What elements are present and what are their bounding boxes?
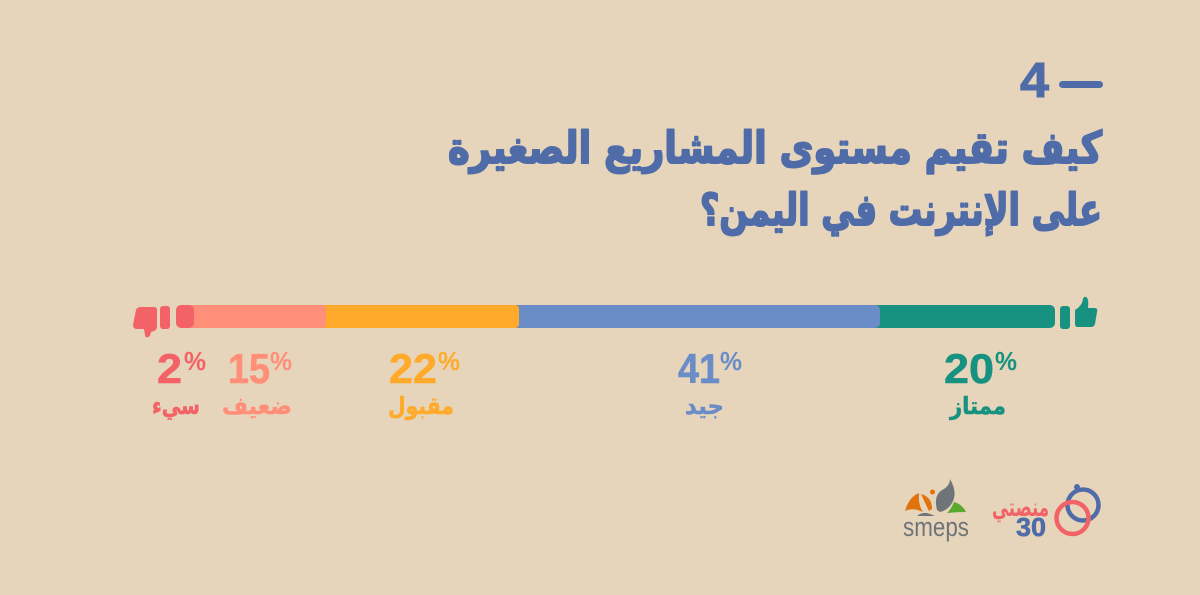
- rating: weak 15%: %: [270, 346, 292, 376]
- stacked rating bar: [176, 305, 1055, 328]
- rating: good 41%: [678, 345, 742, 420]
- rating: acceptable 22%: مقبول: [388, 392, 454, 420]
- rating: poor 2%: سيء: [152, 392, 200, 420]
- logo: smeps: [903, 479, 969, 542]
- logo: minassati 30: [992, 484, 1098, 542]
- rating: acceptable 22%: %: [438, 346, 460, 376]
- rating: excellent 20%: %: [995, 346, 1017, 376]
- rating: good 41%: 41: [678, 345, 720, 392]
- rating: excellent 20%: [944, 345, 1017, 420]
- rating: excellent 20%: ممتاز: [949, 392, 1006, 420]
- title: [448, 123, 1102, 236]
- rating: weak 15%: 15: [228, 345, 270, 392]
- icon: thumbs down: [133, 306, 170, 337]
- rating: poor 2%: %: [184, 346, 206, 376]
- rating: poor 2%: 2: [157, 345, 182, 392]
- rating: acceptable 22%: [388, 345, 460, 420]
- rating: weak 15%: ضعيف: [222, 392, 292, 420]
- rating: weak 15%: [222, 345, 292, 420]
- icon: thumbs up: [1060, 297, 1097, 329]
- rating: good 41%: %: [720, 346, 742, 376]
- logo: minassati 30: منصتي: [992, 493, 1049, 523]
- logo: smeps: smeps: [903, 512, 969, 542]
- logo: minassati 30: 30: [1016, 512, 1046, 542]
- rating: excellent 20%: 20: [944, 345, 994, 392]
- rating: acceptable 22%: 22: [389, 345, 437, 392]
- rating: poor 2%: [152, 345, 206, 420]
- question number: 4: [1020, 54, 1049, 108]
- rating: good 41%: جيد: [685, 392, 724, 420]
- question number: [1020, 54, 1103, 108]
